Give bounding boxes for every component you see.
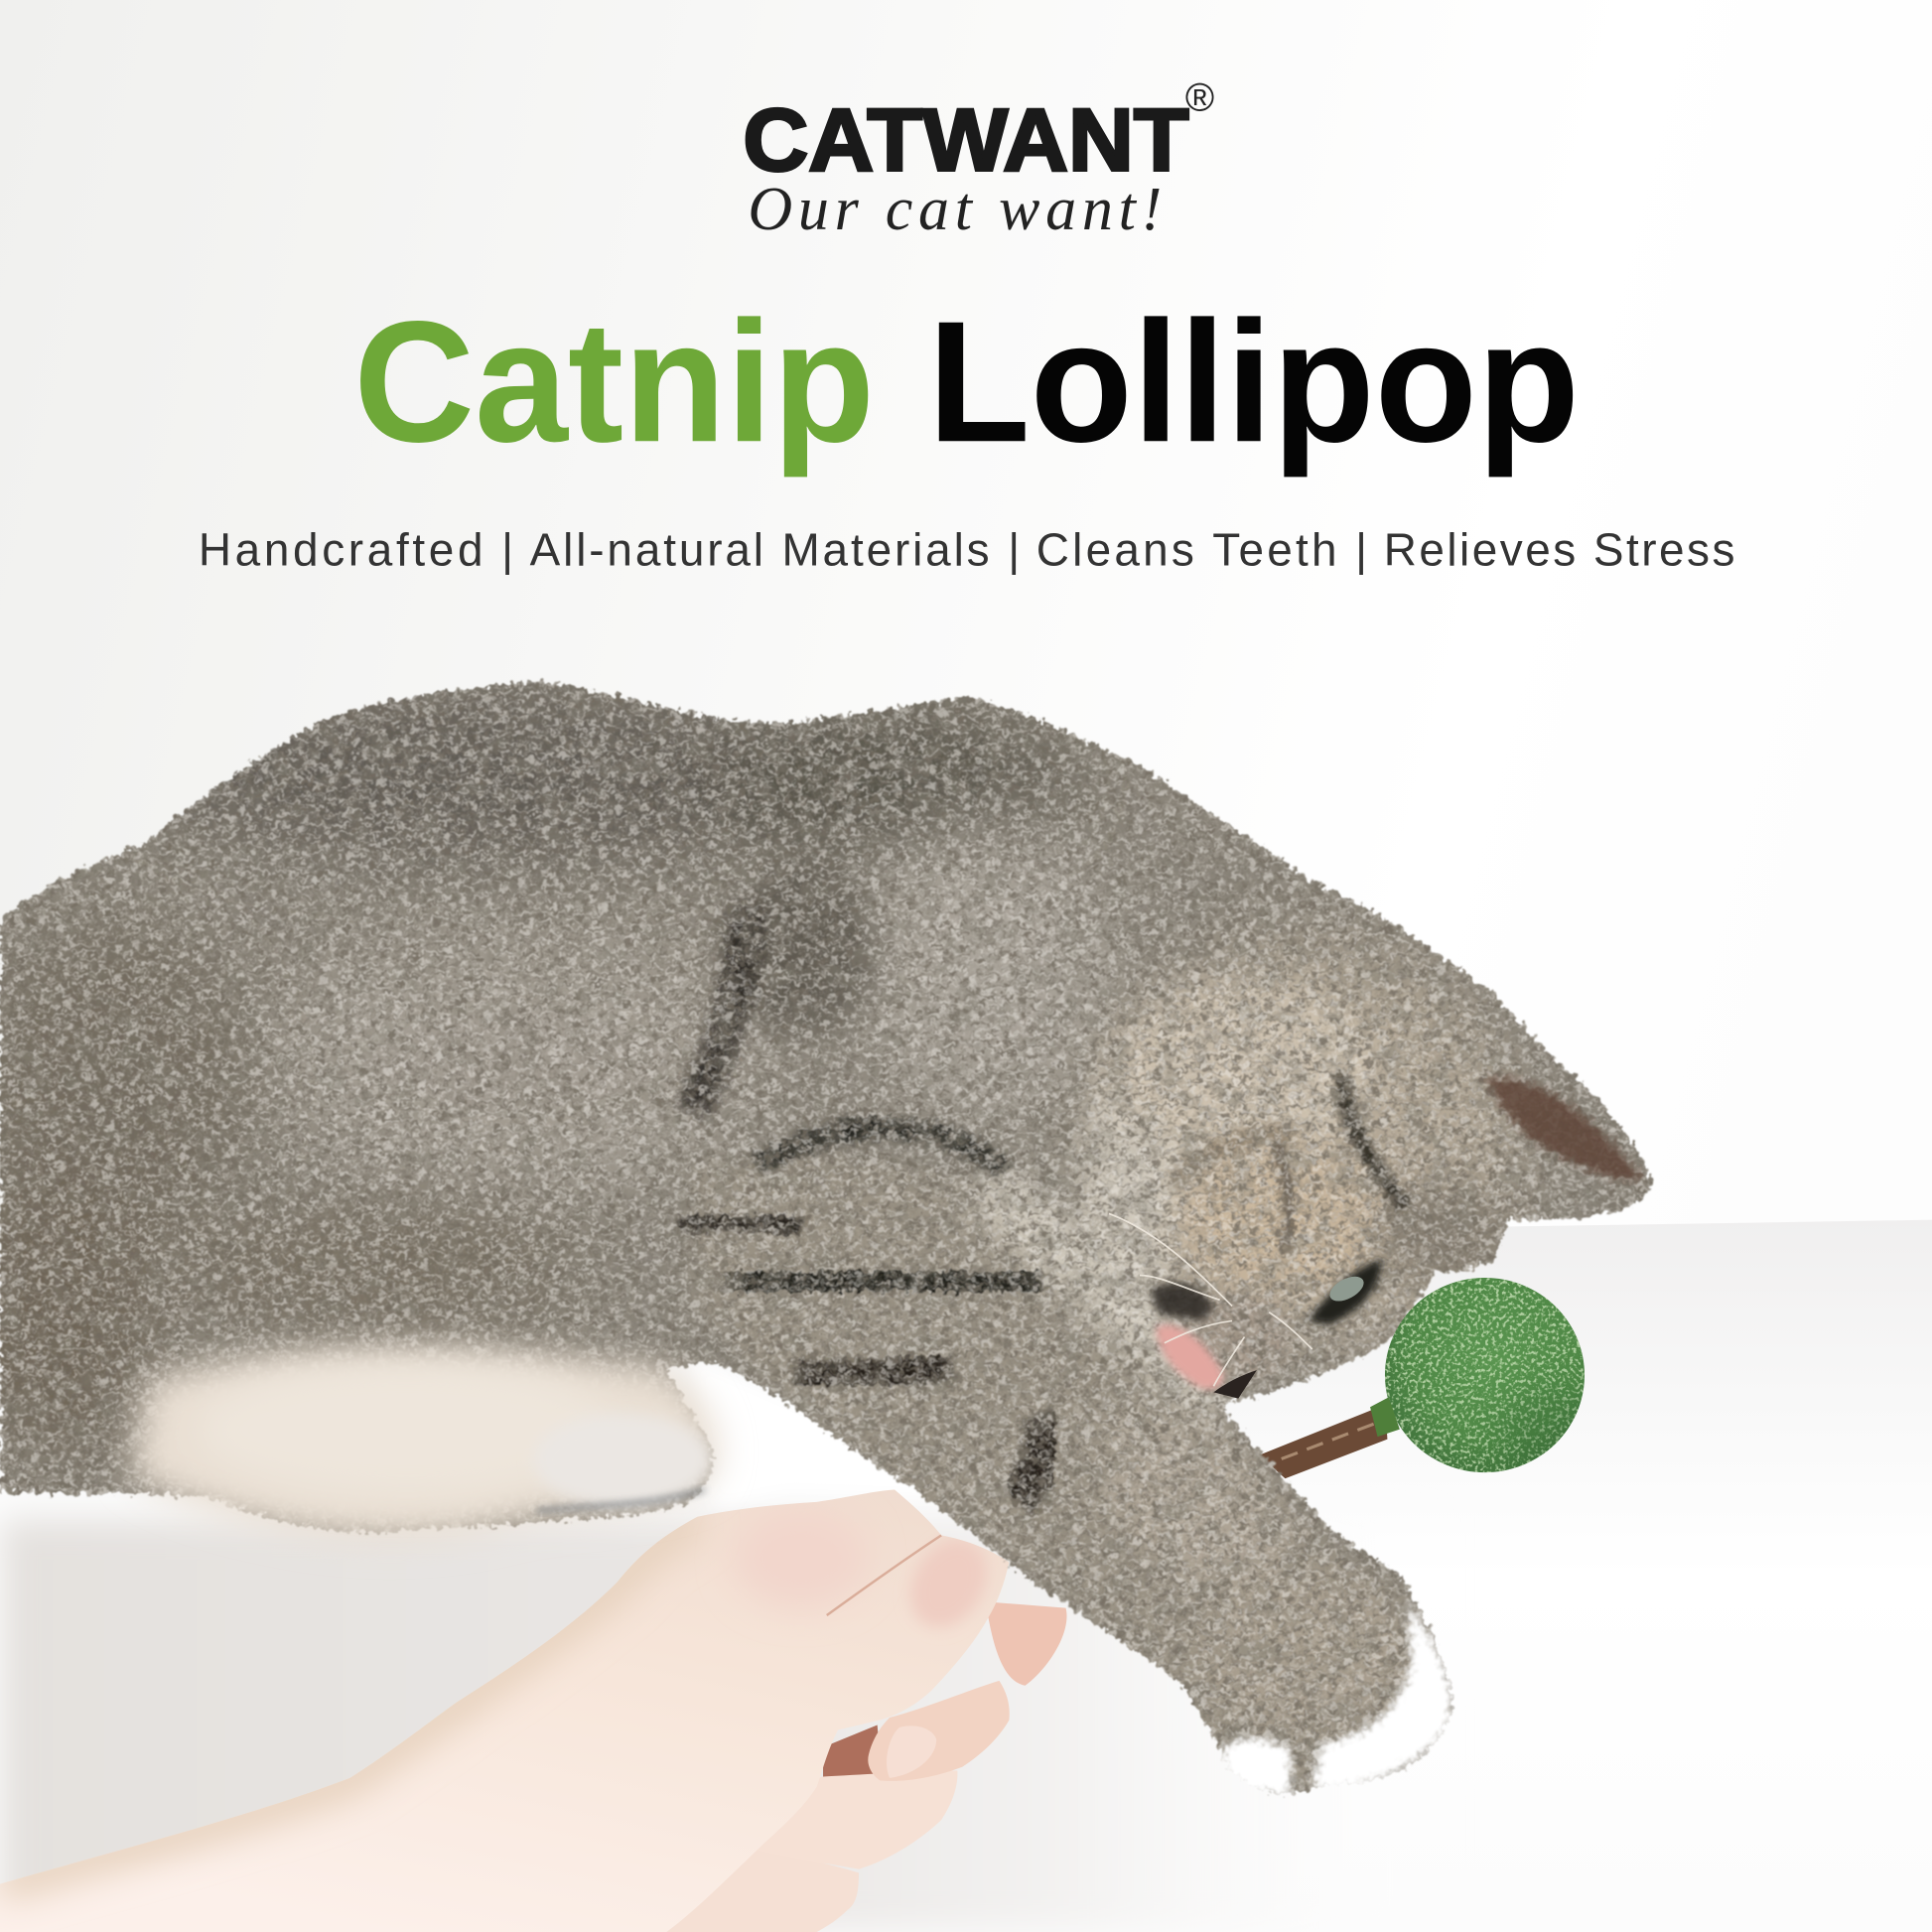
logo wordmark: CATWANT [743,89,1189,189]
cat mouth [1151,1283,1257,1399]
little finger [653,1849,859,1932]
subtitle: | [1008,524,1020,576]
subtitle [199,524,1734,576]
stick of lollipop [1259,1405,1387,1478]
subtitle: Relieves Stress [1384,524,1734,576]
logo [743,76,1214,243]
cat [0,665,1676,1811]
subtitle: | [1355,524,1367,576]
subtitle: Cleans Teeth [1036,524,1337,576]
shadow gap and stick [823,1725,883,1784]
cat eye highlight [1325,1272,1368,1307]
cat arm [697,1157,1350,1785]
subtitle: Handcrafted [199,524,483,576]
title [353,285,1580,478]
finger nail [887,1725,936,1778]
cat shoulder stripe [727,863,875,1035]
registered mark: ® [1185,76,1214,120]
cat belly fur [129,1348,719,1539]
title word: Lollipop: Lollipop [928,285,1580,478]
cat whiskers [1109,1213,1312,1386]
hand [0,1478,1066,1932]
ring finger [755,1770,957,1869]
rear paw claw line [537,1489,705,1511]
palm and wrist [0,1478,1023,1932]
table shadow left [0,1518,1453,1932]
middle finger [868,1681,1010,1781]
subtitle: All-natural Materials [530,524,990,576]
fur light streak texture [0,665,1676,1811]
index finger [986,1601,1066,1686]
subtitle: | [501,524,513,576]
title word: Catnip: Catnip [353,285,875,478]
cat head [1097,942,1516,1349]
cat rear paw [533,1414,711,1507]
white glow below belly [690,1355,961,1506]
cat white toes [1312,1601,1451,1790]
cat eye [1309,1259,1382,1324]
logo tagline: Our cat want! [748,176,1162,243]
fur mottling texture [0,692,1521,1756]
cat muzzle [1199,1298,1271,1376]
fur dark streak texture [0,665,1676,1811]
cat ear inner [1484,1077,1645,1180]
cat back shading [148,690,838,863]
catnip ball [1370,1269,1620,1482]
table surface [0,1220,1932,1932]
